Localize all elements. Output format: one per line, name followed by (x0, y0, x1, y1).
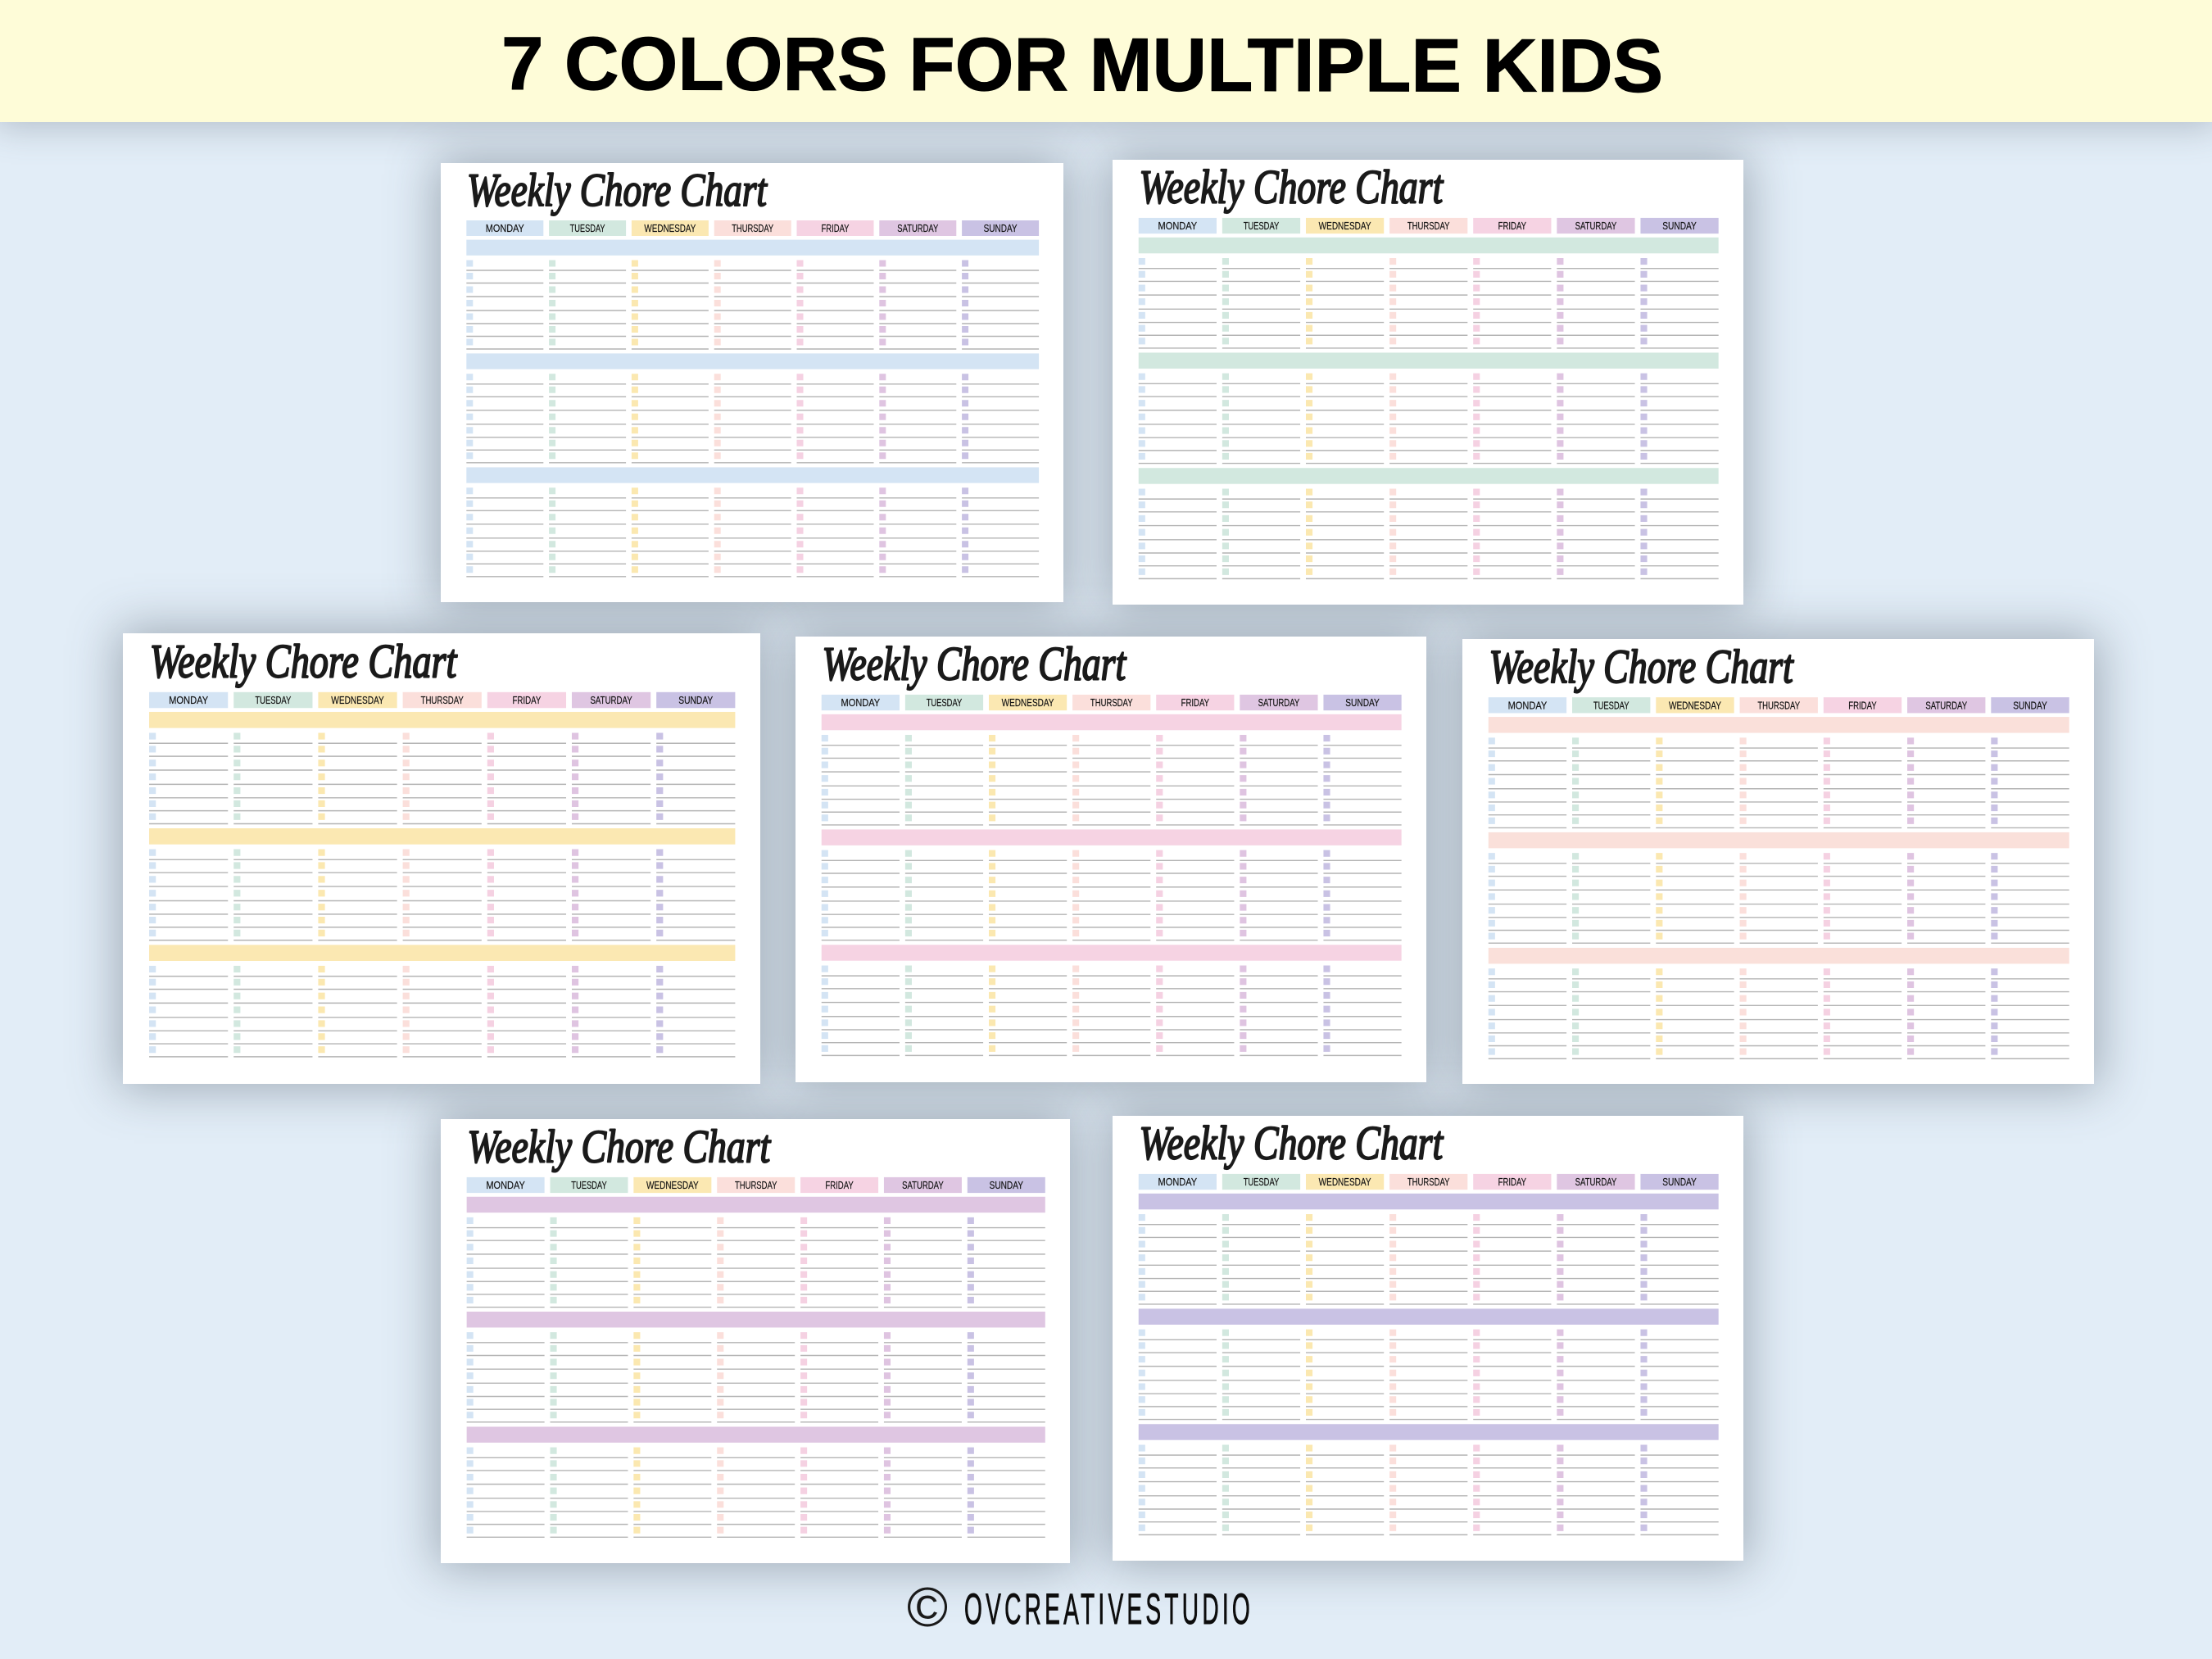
task rows (467, 1217, 1045, 1537)
weekday header: THURSDAY (1407, 220, 1450, 232)
panel: yellow chart (123, 633, 760, 1084)
weekday header: THURSDAY (421, 694, 464, 706)
weekday header: FRIDAY (825, 1179, 854, 1191)
weekday header: SUNDAY (984, 222, 1018, 234)
weekday header: MONDAY (1508, 699, 1547, 711)
weekday header (1139, 1174, 1719, 1190)
chart title: Weekly Chore Chart (467, 165, 768, 216)
weekday header: SUNDAY (678, 694, 713, 706)
weekday header: SATURDAY (1925, 699, 1967, 711)
weekday header: WEDNESDAY (644, 222, 696, 234)
kid name bands (1139, 238, 1719, 484)
weekday header: THURSDAY (1090, 696, 1133, 709)
task rows (1139, 258, 1719, 578)
panel: purple chart (441, 1119, 1070, 1563)
weekday header: TUESDAY (571, 1179, 607, 1191)
chart title: Weekly Chore Chart (467, 1122, 772, 1173)
weekday header: MONDAY (169, 694, 208, 706)
weekday header: SUNDAY (1345, 696, 1380, 709)
weekday header (467, 1177, 1045, 1193)
weekday header: WEDNESDAY (646, 1179, 699, 1191)
chart title: Weekly Chore Chart (822, 639, 1127, 691)
weekday header: THURSDAY (1407, 1176, 1450, 1188)
chart title: Weekly Chore Chart (1139, 162, 1444, 214)
weekday header: WEDNESDAY (331, 694, 384, 706)
weekday header: SUNDAY (1662, 220, 1697, 232)
weekday header: SATURDAY (902, 1179, 944, 1191)
weekday header: FRIDAY (1181, 696, 1209, 709)
kid name bands (1489, 717, 2069, 963)
weekday header: SATURDAY (590, 694, 632, 706)
weekday header: FRIDAY (1498, 220, 1526, 232)
weekday header: SATURDAY (897, 222, 939, 234)
title: 7 COLORS FOR MULTIPLE KIDS (501, 22, 1663, 108)
weekday header: WEDNESDAY (1669, 699, 1721, 711)
weekday header: WEDNESDAY (1319, 1176, 1371, 1188)
weekday header: WEDNESDAY (1319, 220, 1371, 232)
kid name bands (466, 240, 1039, 483)
chart title: Weekly Chore Chart (1139, 1118, 1444, 1170)
weekday header: TUESDAY (1244, 220, 1279, 232)
kid name bands (1139, 1194, 1719, 1440)
weekday header: SUNDAY (2013, 699, 2047, 711)
task rows (1139, 1214, 1719, 1534)
weekday header: FRIDAY (513, 694, 541, 706)
weekday header: THURSDAY (735, 1179, 777, 1191)
weekday header: THURSDAY (1757, 699, 1800, 711)
task rows (466, 261, 1039, 577)
weekday header: SUNDAY (990, 1179, 1023, 1191)
kid name bands (149, 712, 735, 961)
footer credit (907, 1577, 1253, 1639)
weekday header (149, 692, 735, 708)
weekday header: WEDNESDAY (1002, 696, 1054, 709)
weekday header: FRIDAY (821, 222, 850, 234)
task rows (822, 735, 1402, 1055)
weekday header (466, 220, 1039, 236)
weekday header (1489, 697, 2069, 713)
panel: pink chart (796, 637, 1426, 1082)
task rows (1489, 737, 2069, 1058)
icon: copyright: © (907, 1577, 948, 1639)
weekday header: SATURDAY (1575, 1176, 1616, 1188)
panel: lavender chart (1113, 1116, 1743, 1561)
chart title: Weekly Chore Chart (1489, 640, 1794, 693)
panel: green chart (1113, 160, 1743, 605)
weekday header: MONDAY (1158, 220, 1197, 232)
weekday header: MONDAY (486, 1179, 525, 1191)
weekday header (822, 695, 1402, 710)
weekday header: FRIDAY (1498, 1176, 1526, 1188)
weekday header: TUESDAY (927, 696, 962, 709)
weekday header: SUNDAY (1662, 1176, 1697, 1188)
header banner (0, 0, 2212, 122)
weekday header: FRIDAY (1848, 699, 1877, 711)
weekday header: TUESDAY (570, 222, 605, 234)
task rows (149, 732, 735, 1057)
weekday header: MONDAY (486, 222, 524, 234)
weekday header: MONDAY (841, 696, 880, 709)
weekday header: SATURDAY (1575, 220, 1616, 232)
weekday header: TUESDAY (1593, 699, 1630, 711)
weekday header: TUESDAY (255, 694, 291, 706)
panel: peach chart (1462, 639, 2094, 1084)
weekday header: MONDAY (1158, 1176, 1197, 1188)
kid name bands (822, 714, 1402, 961)
weekday header: TUESDAY (1244, 1176, 1279, 1188)
weekday header (1139, 218, 1719, 233)
panel: blue chart (441, 163, 1063, 602)
kid name bands (467, 1197, 1045, 1443)
weekday header: SATURDAY (1258, 696, 1299, 709)
weekday header: THURSDAY (732, 222, 773, 234)
chart title: Weekly Chore Chart (150, 634, 458, 687)
